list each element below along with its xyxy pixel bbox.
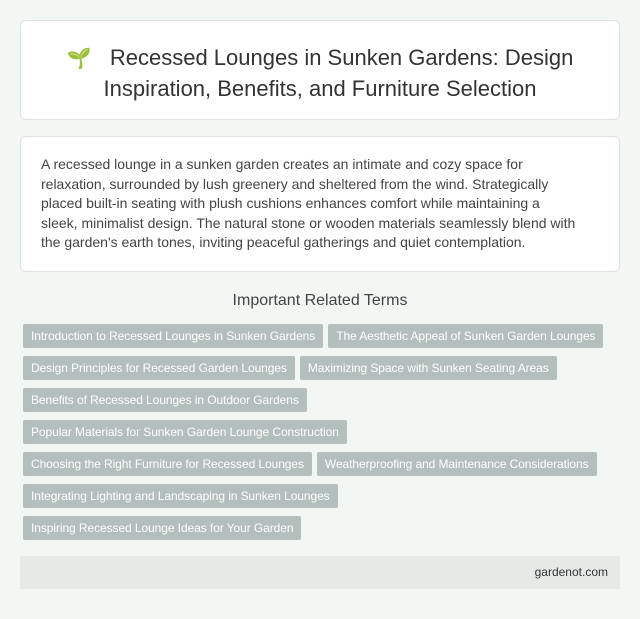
title xyxy=(20,20,620,120)
tags xyxy=(23,324,603,540)
footer xyxy=(20,556,620,589)
description xyxy=(20,136,620,272)
tags: Inspiring Recessed Lounge Ideas for Your Garden xyxy=(31,521,293,535)
tags: The Aesthetic Appeal of Sunken Garden Lounges xyxy=(336,329,595,343)
heading: related terms: Important Related Terms xyxy=(233,292,407,309)
tags: Integrating Lighting and Landscaping in Sunken Lounges xyxy=(31,489,330,503)
tags: Design Principles for Recessed Garden Lounges xyxy=(31,361,287,375)
tags: Weatherproofing and Maintenance Considerations xyxy=(325,457,589,471)
description: A recessed lounge in a sunken garden creates an intimate and cozy space for relaxation, surrounded by lush greenery and sheltered from the wind. Strategically placed built-in seating with plush cushions enhances comfort while maintaining a sleek, minimalist design. The natural stone or wooden materials seamlessly blend with the garden's earth tones, inviting peaceful gatherings and quiet contemplation. xyxy=(41,156,575,250)
footer: gardenot.com xyxy=(535,565,608,579)
tags: Popular Materials for Sunken Garden Lounge Construction xyxy=(31,425,339,439)
title: 🌱 Recessed Lounges in Sunken Gardens: Design xyxy=(67,45,573,70)
tags: Maximizing Space with Sunken Seating Areas xyxy=(308,361,549,375)
tags: Benefits of Recessed Lounges in Outdoor Gardens xyxy=(31,393,299,407)
tags: Choosing the Right Furniture for Recessed Lounges xyxy=(31,457,304,471)
tags: Introduction to Recessed Lounges in Sunken Gardens xyxy=(31,329,315,343)
title: Inspiration, Benefits, and Furniture Selection xyxy=(104,76,536,101)
